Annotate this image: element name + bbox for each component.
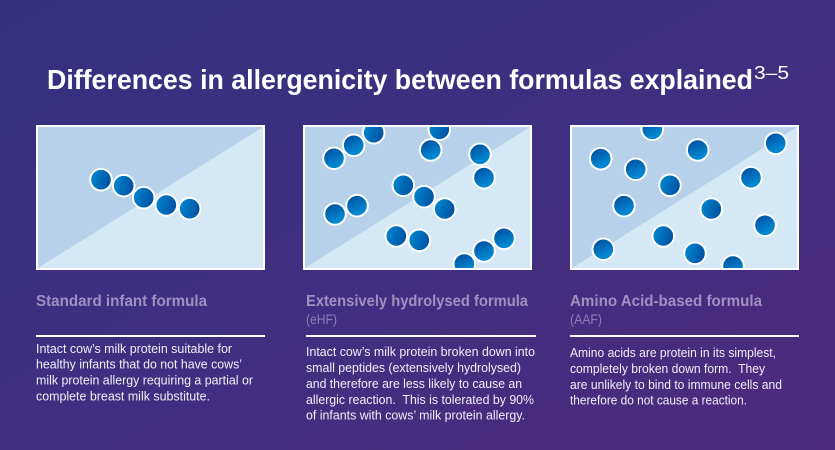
subheading: eHF: (eHF) [306, 311, 337, 327]
title: 3–5 [754, 63, 789, 83]
description: extensively hydrolysed formula: small peptides (extensively hydrolysed) [306, 361, 521, 375]
description: standard infant formula: healthy infants that do not have cows’ [36, 358, 242, 372]
diagram: intact protein chain [37, 126, 264, 269]
subheading: AAF: (AAF) [570, 311, 602, 327]
description: extensively hydrolysed formula: allergic reaction. This is tolerated by 90% [306, 393, 534, 407]
description: standard infant formula: complete breast milk substitute. [36, 390, 210, 404]
panel: extensively hydrolysed formula [304, 118, 536, 423]
heading: extensively hydrolysed formula: Extensively hydrolysed formula [306, 293, 528, 310]
description: extensively hydrolysed formula: Intact cow’s milk protein broken down into [306, 345, 535, 359]
description: extensively hydrolysed formula [306, 345, 535, 423]
description: extensively hydrolysed formula: and therefore are less likely to cause an [306, 377, 522, 391]
panel: standard infant formula [36, 126, 265, 404]
description: standard infant formula: milk protein allergy requiring a partial or [36, 374, 253, 388]
description: amino acid-based formula: are unlikely to bind to immune cells and [570, 378, 782, 392]
description: amino acid-based formula: Amino acids are protein in its simplest, [570, 346, 776, 360]
title: Differences in allergenicity between formulas explained [47, 64, 753, 95]
diagram: free amino acids [571, 118, 798, 277]
panel: amino acid-based formula [570, 118, 799, 408]
description: standard infant formula [36, 342, 253, 404]
description: amino acid-based formula [570, 346, 782, 408]
description: standard infant formula: Intact cow’s milk protein suitable for [36, 342, 232, 356]
diagram: small peptides [304, 118, 531, 275]
description: extensively hydrolysed formula: of infants with cows’ milk protein allergy. [306, 409, 525, 423]
description: amino acid-based formula: completely broken down form. They [570, 362, 766, 376]
heading: amino acid-based formula: Amino Acid-based formula [570, 293, 762, 310]
description: amino acid-based formula: therefore do not cause a reaction. [570, 394, 747, 408]
heading: standard infant formula: Standard infant formula [36, 293, 207, 310]
